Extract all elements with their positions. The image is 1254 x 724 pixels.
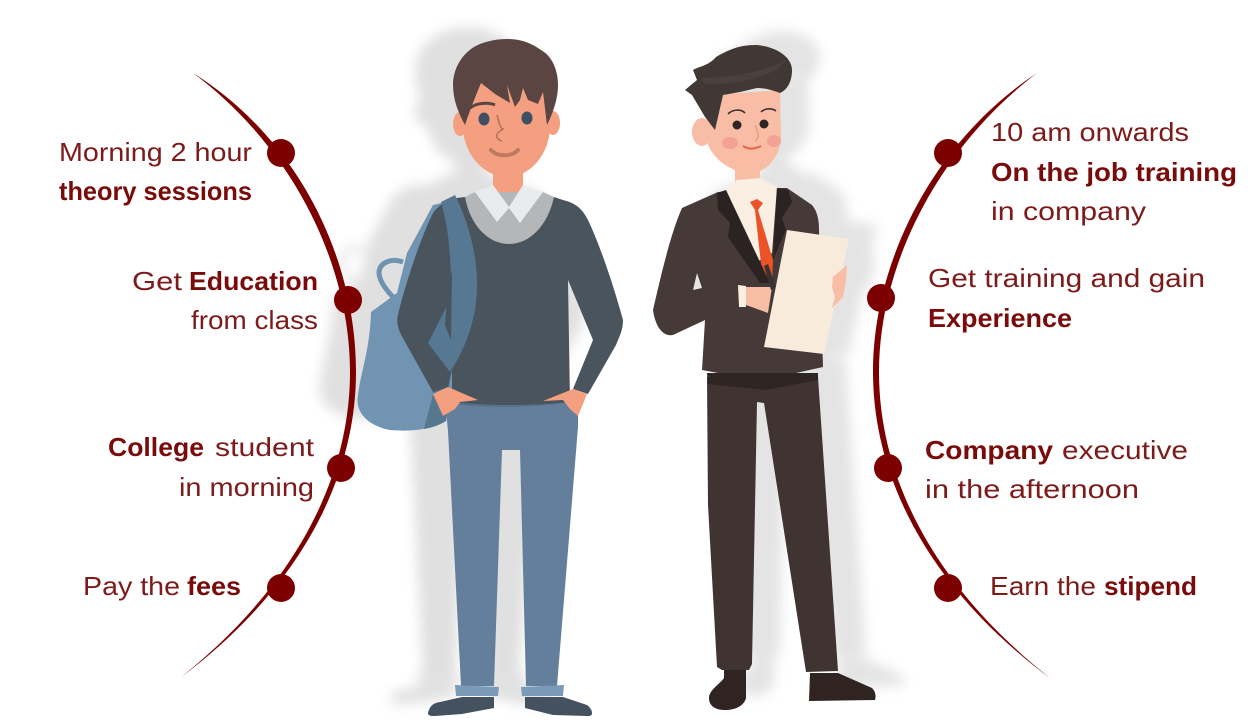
- hand on paper: [832, 265, 847, 308]
- text: experience: Get training and gain: [928, 263, 1205, 293]
- hair: [685, 45, 792, 130]
- paper: [764, 230, 849, 354]
- text: on the job training: in company: [991, 196, 1146, 226]
- text: pay fees: fees: [187, 571, 241, 601]
- illustration: businessman: [653, 45, 876, 710]
- cheeks: [722, 135, 781, 149]
- trouser cuffs: [455, 685, 564, 696]
- text: company executive: Company: [925, 435, 1054, 465]
- text: pay fees: Pay the: [83, 571, 180, 601]
- left arc: [180, 73, 356, 678]
- panel: student side points: [59, 73, 362, 678]
- ears: [453, 111, 560, 136]
- sweater: [397, 197, 623, 405]
- panel: trainee side points: [867, 73, 1237, 678]
- text: morning theory: theory sessions: [59, 176, 252, 206]
- face: [708, 90, 781, 173]
- hair: [453, 39, 558, 125]
- text: education: Education: [189, 266, 318, 296]
- shirt: [726, 178, 777, 262]
- text: education: from class: [191, 305, 318, 335]
- text: education: Get: [132, 266, 183, 296]
- illustration: student: [357, 39, 623, 716]
- shoes: [709, 670, 876, 710]
- tie: [750, 199, 773, 287]
- grey v-neck: [465, 192, 554, 244]
- text: on the job training: On the job training: [991, 157, 1237, 187]
- text: company executive: [925, 435, 1188, 504]
- text: stipend: stipend: [1104, 571, 1197, 601]
- text: company executive: in the afternoon: [925, 474, 1139, 504]
- text: college student: College: [108, 432, 204, 462]
- text: company executive: executive: [1062, 435, 1188, 465]
- eyes and mouth: [470, 103, 532, 155]
- backpack strap: [428, 195, 477, 372]
- lapels: [717, 188, 792, 283]
- backpack: [357, 200, 470, 431]
- shirt collar: [475, 185, 543, 223]
- jacket: [653, 188, 823, 381]
- pants: [445, 400, 578, 686]
- text: experience: Experience: [928, 303, 1072, 333]
- writing hand and cuff: [738, 264, 776, 313]
- text: morning theory: [59, 137, 252, 206]
- marker dots: [267, 139, 362, 602]
- trousers: [707, 377, 838, 672]
- hands: [433, 387, 587, 416]
- text: college student: [108, 432, 315, 502]
- text: pay fees: [83, 571, 241, 601]
- text: on the job training: 10 am onwards: [991, 117, 1189, 147]
- text: stipend: [990, 571, 1197, 601]
- text: college student: in morning: [179, 472, 314, 502]
- ear: [692, 118, 712, 146]
- neck: [735, 160, 760, 183]
- eyes and mouth: [728, 109, 776, 149]
- text: on the job training: [991, 117, 1237, 226]
- face: [463, 80, 550, 177]
- shoes: [428, 697, 592, 716]
- arm gap: [693, 273, 702, 290]
- hair highlight: [700, 58, 788, 84]
- text: college student: student: [215, 432, 315, 462]
- right arc: [873, 73, 1050, 678]
- marker dots: [867, 139, 962, 602]
- text: experience: [928, 263, 1205, 333]
- text: stipend: Earn the: [990, 571, 1096, 601]
- text: education: [132, 266, 318, 335]
- belt: [707, 373, 818, 390]
- text: morning theory: Morning 2 hour: [59, 137, 252, 167]
- neck: [493, 165, 523, 208]
- waistband: [460, 399, 565, 407]
